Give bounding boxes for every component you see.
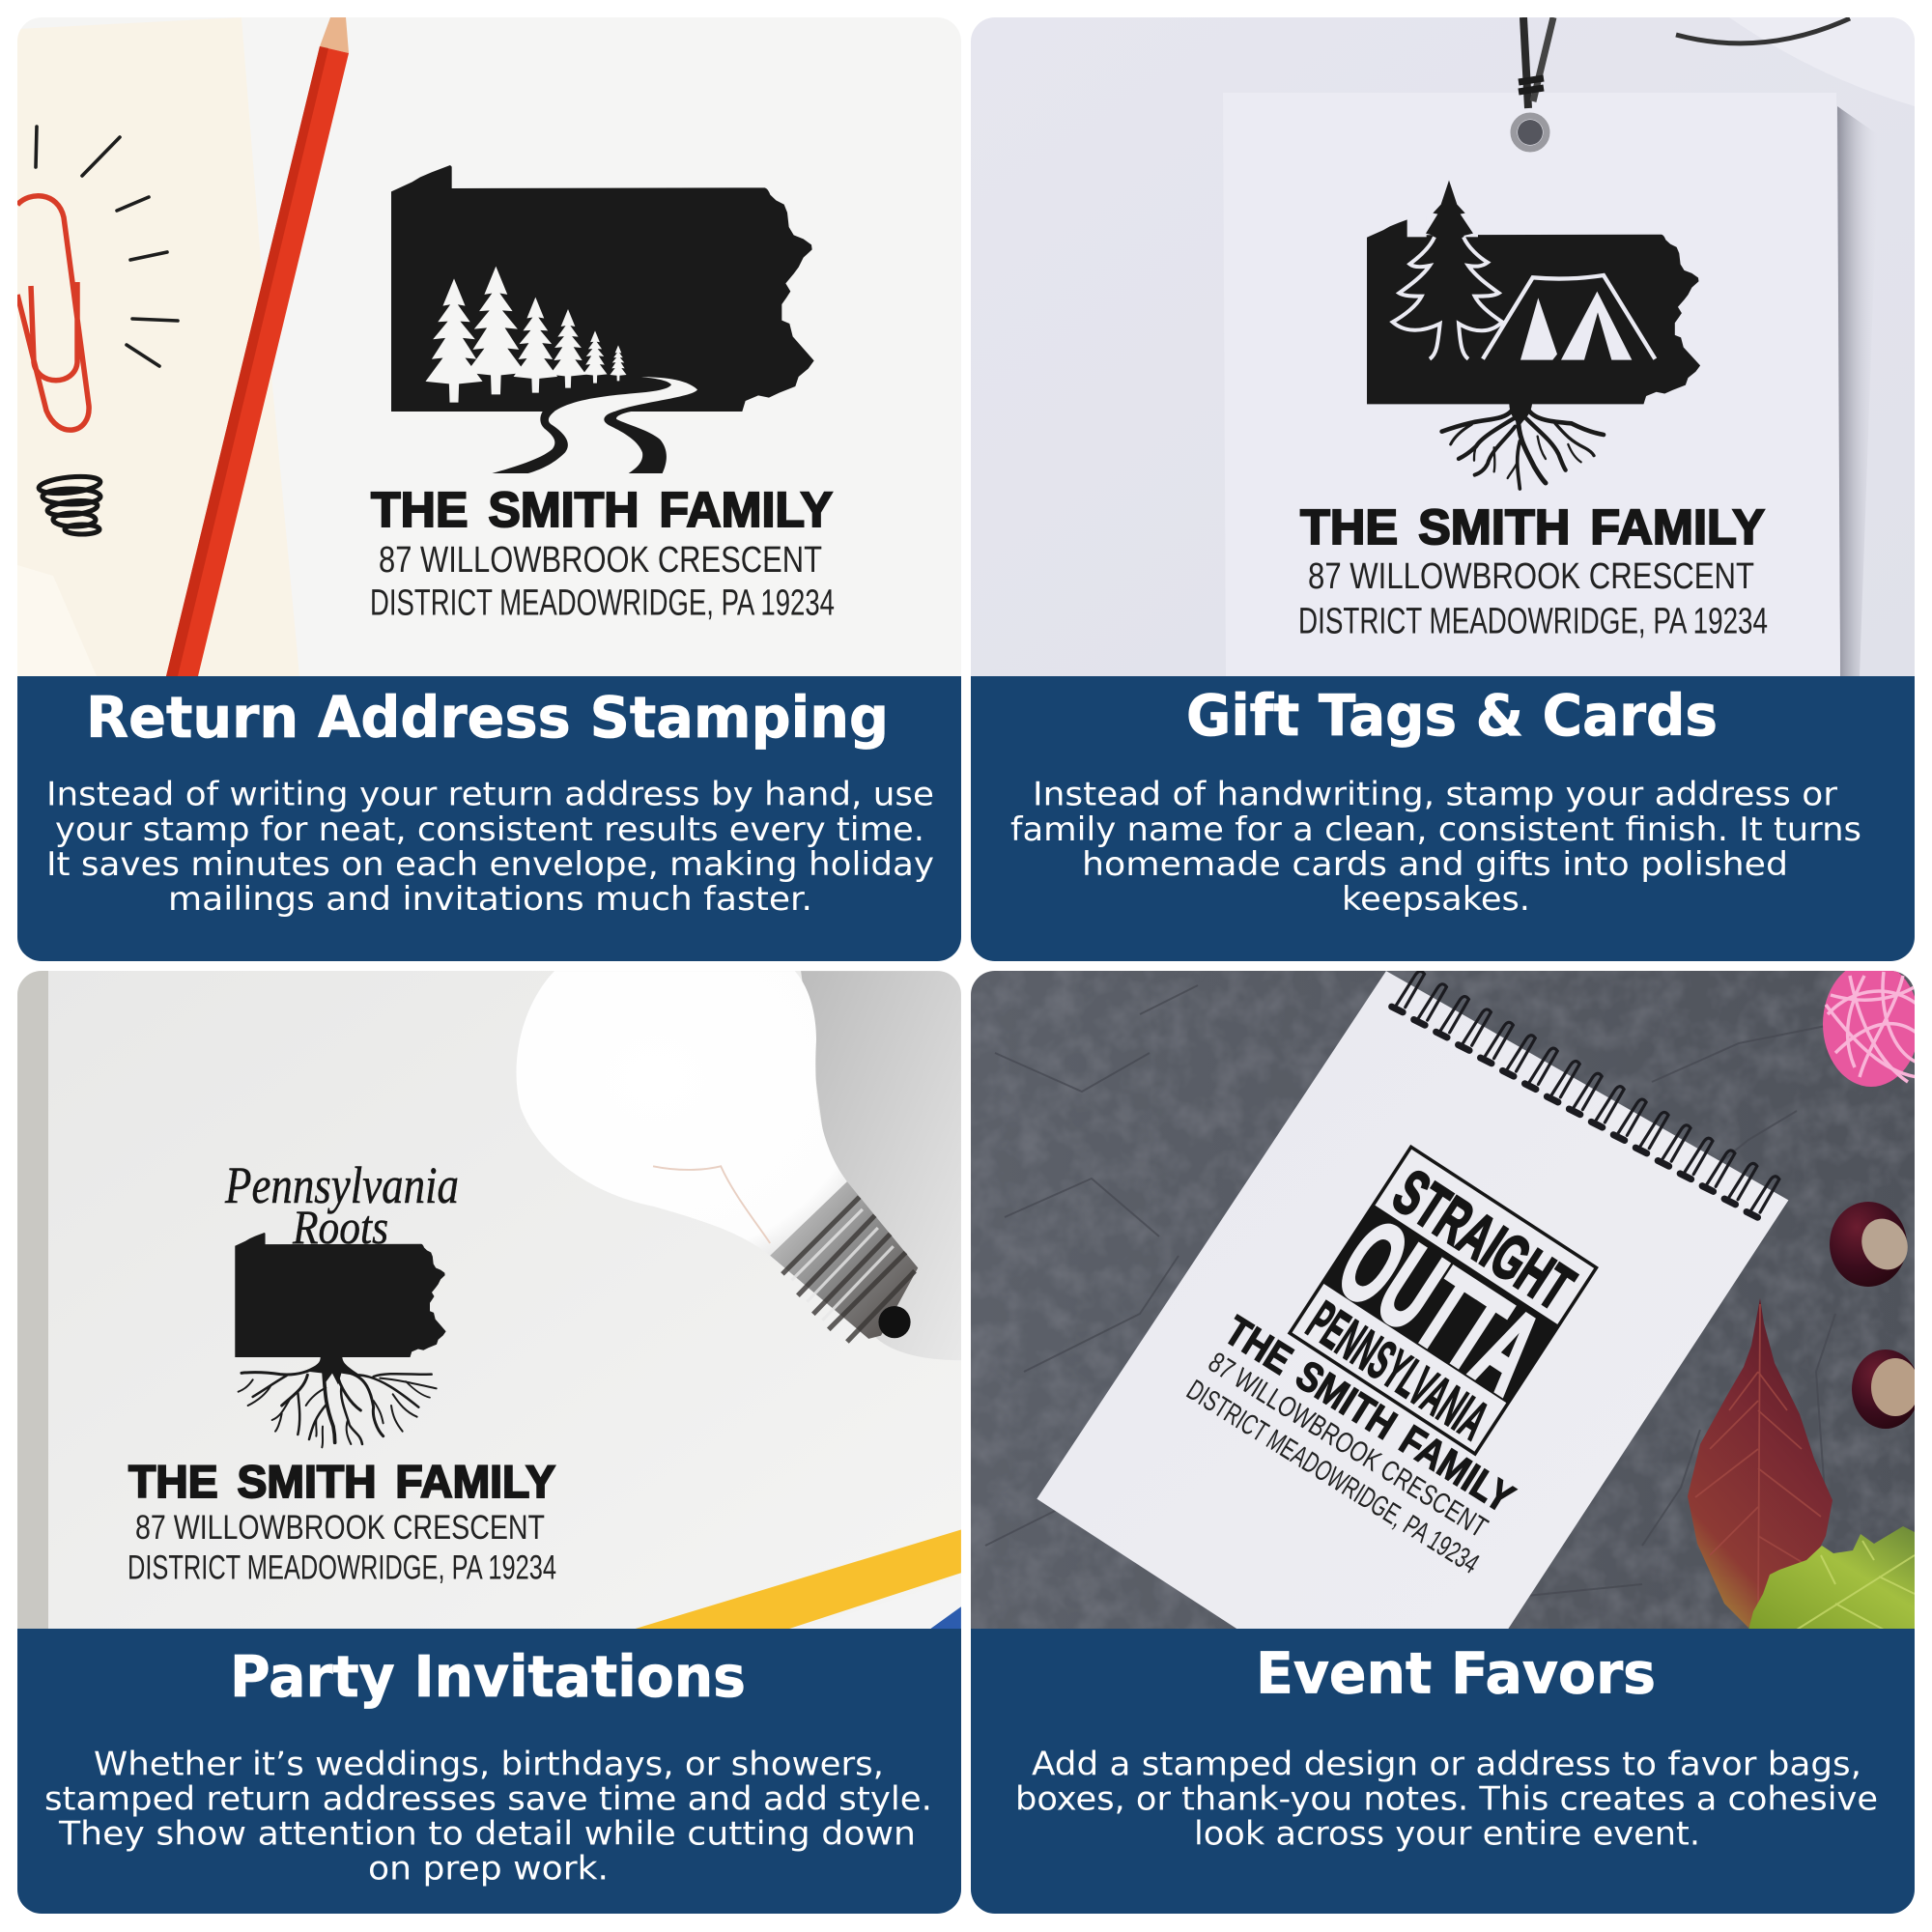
stamp text: city: DISTRICT MEADOWRIDGE, PA 19234 [1298, 601, 1768, 641]
photo: hanging gift tag [971, 17, 1915, 676]
script heading: Pennsylvania Roots [224, 1166, 458, 1244]
body text [1010, 775, 1861, 918]
heading: Party Invitations [230, 1643, 746, 1710]
icon: chestnut bottom [1852, 1350, 1919, 1429]
icon: red pencil [166, 17, 349, 676]
stamp artwork: straight outta box [1288, 1147, 1597, 1457]
notebook page [1037, 971, 1788, 1629]
body text: boxes, or thank-you notes. This creates a cohesive [1015, 1779, 1878, 1818]
heading: Event Favors [1256, 1640, 1656, 1706]
icon: green leaf [1748, 1526, 1915, 1630]
stamp artwork: straight outta box: STRAIGHT [1381, 1155, 1586, 1323]
body text: homemade cards and gifts into polished [1082, 845, 1788, 883]
stamp text: family name: THE SMITH FAMILY [371, 482, 833, 537]
panel: return address stamping [17, 17, 961, 961]
stamp artwork: state with roots [235, 1233, 446, 1447]
stamp text: family name: THE SMITH FAMILY [1216, 1308, 1521, 1522]
photo: paper, light bulb and pencil [17, 971, 961, 1630]
body text: Add a stamped design or address to favor bags, [1032, 1745, 1861, 1783]
stamp text: street: 87 WILLOWBROOK CRESCENT [1308, 556, 1754, 597]
body text: It saves minutes on each envelope, making holiday [46, 845, 934, 883]
icon: pink rattan ball [1823, 961, 1919, 1087]
script heading: Pennsylvania Roots: Roots [292, 1200, 388, 1254]
photo: envelope, pencil and paperclip [17, 17, 961, 676]
body text: family name for a clean, consistent finish. It turns [1010, 810, 1861, 848]
body text: They show attention to detail while cutting down [58, 1814, 916, 1853]
body text [46, 775, 934, 918]
gift tag card [1223, 93, 1840, 676]
caption background [971, 1629, 1915, 1915]
body text: look across your entire event. [1194, 1814, 1700, 1853]
stamp text: street: 87 WILLOWBROOK CRESCENT [379, 540, 822, 581]
stamp text: city: DISTRICT MEADOWRIDGE, PA 19234 [128, 1549, 556, 1586]
stamp text: family name: THE SMITH FAMILY [128, 1456, 555, 1507]
body text [44, 1745, 932, 1888]
tag shadow [1837, 106, 1866, 676]
body text: Instead of writing your return address by hand, use [46, 775, 934, 813]
script heading: Pennsylvania Roots: Pennsylvania [224, 1156, 459, 1214]
body text: your stamp for neat, consistent results every time. [55, 810, 924, 848]
panel: party invitations [17, 971, 961, 1915]
stamp artwork: state with trees and river [391, 165, 814, 473]
stamp artwork: state with tree, tent and roots [1367, 181, 1700, 489]
bulb shadow [801, 971, 961, 1360]
icon: yellow pencil [635, 1530, 961, 1629]
photo: notebook on grey concrete [971, 961, 1919, 1630]
caption background [17, 1629, 961, 1915]
stamp text: street: 87 WILLOWBROOK CRESCENT [135, 1509, 545, 1547]
icon: doodle rays [36, 127, 178, 366]
icon: chestnut top [1830, 1202, 1916, 1287]
stamp artwork: straight outta box: PENNSYLVANIA [1296, 1290, 1499, 1452]
heading: Return Address Stamping [86, 684, 889, 751]
stamp text: city: DISTRICT MEADOWRIDGE, PA 19234 [1181, 1374, 1485, 1580]
body text [1015, 1745, 1878, 1853]
stamp text: city: DISTRICT MEADOWRIDGE, PA 19234 [370, 583, 835, 624]
icon: cord and eyelet [1514, 17, 1850, 149]
caption background [17, 676, 961, 961]
icon: scribble bulb base [38, 474, 101, 534]
body text: mailings and invitations much faster. [168, 880, 812, 918]
caption background [971, 676, 1915, 961]
icon: paperclip [17, 196, 89, 430]
body text: Whether it’s weddings, birthdays, or showers, [94, 1745, 884, 1783]
body text: keepsakes. [1342, 880, 1530, 918]
icon: red autumn leaf [1688, 1298, 1833, 1628]
body text: Instead of handwriting, stamp your address or [1033, 775, 1837, 813]
body text: stamped return addresses save time and add style. [44, 1779, 932, 1818]
panel: gift tags and cards [971, 17, 1915, 961]
body text: on prep work. [368, 1849, 609, 1888]
stamp text: family name: THE SMITH FAMILY [1300, 499, 1765, 554]
spiral binding [1392, 971, 1779, 1217]
concrete texture [971, 971, 1915, 1630]
stamp text: street: 87 WILLOWBROOK CRESCENT [1203, 1347, 1492, 1545]
icon: light bulb [517, 971, 918, 1342]
panel: event favors [971, 961, 1919, 1915]
heading: Gift Tags & Cards [1186, 682, 1718, 749]
stamp artwork: straight outta box: OUTTA [1318, 1195, 1562, 1418]
